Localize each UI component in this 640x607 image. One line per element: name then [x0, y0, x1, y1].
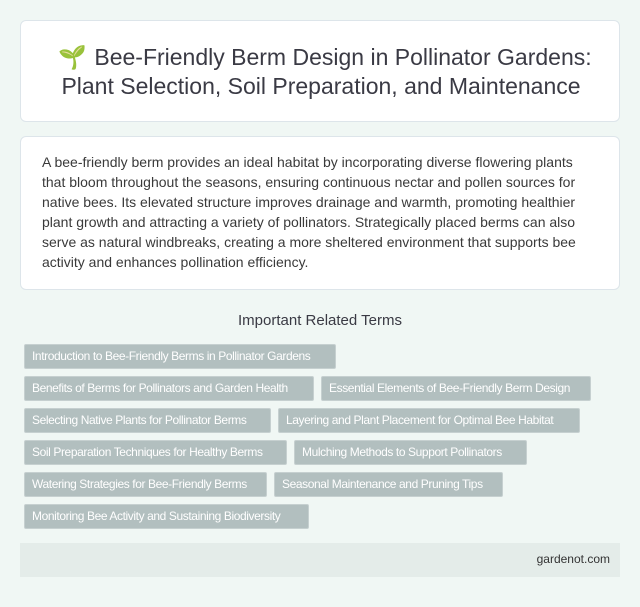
- title: 🌱: [58, 44, 87, 70]
- title: Bee-Friendly Berm Design in Pollinator Gardens:: [94, 44, 592, 70]
- title: [58, 44, 592, 99]
- tag: [24, 504, 309, 529]
- description card: [20, 136, 620, 290]
- tag: Watering Strategies for Bee-Friendly Berms: [32, 477, 247, 491]
- tag: Soil Preparation Techniques for Healthy Berms: [32, 445, 263, 459]
- tag: [278, 408, 580, 433]
- tag: [24, 440, 287, 465]
- tag: Benefits of Berms for Pollinators and Garden Health: [32, 381, 288, 395]
- tag: [24, 344, 336, 369]
- tag: [321, 376, 591, 401]
- terms tags: [24, 344, 591, 529]
- tag: Monitoring Bee Activity and Sustaining Biodiversity: [32, 509, 280, 523]
- tag: Layering and Plant Placement for Optimal Bee Habitat: [286, 413, 553, 427]
- footer: [20, 543, 620, 577]
- tag: [24, 376, 314, 401]
- title card: [20, 20, 620, 122]
- footer source: gardenot.com: [537, 552, 610, 566]
- tag: Introduction to Bee-Friendly Berms in Pollinator Gardens: [32, 349, 310, 363]
- title: Plant Selection, Soil Preparation, and Maintenance: [61, 73, 581, 99]
- tag: [24, 472, 267, 497]
- tag: Essential Elements of Bee-Friendly Berm Design: [329, 381, 570, 395]
- terms heading: Important Related Terms: [238, 312, 402, 329]
- tag: Selecting Native Plants for Pollinator Berms: [32, 413, 247, 427]
- tag: Mulching Methods to Support Pollinators: [302, 445, 502, 459]
- tag: Seasonal Maintenance and Pruning Tips: [282, 477, 483, 491]
- tag: [294, 440, 527, 465]
- description text: A bee-friendly berm provides an ideal habitat by incorporating diverse flowering plants that bloom throughout the seasons, ensuring continuous nectar and pollen sources for native bees. Its elevated structure improves drainage and warmth, promoting healthier plant growth and attracting a variety of pollinators. Strategically placed berms can also serve as natural windbreaks, creating a more sheltered environment that supports bee activity and enhances pollination efficiency.: [42, 154, 576, 270]
- tag: [24, 408, 271, 433]
- tag: [274, 472, 503, 497]
